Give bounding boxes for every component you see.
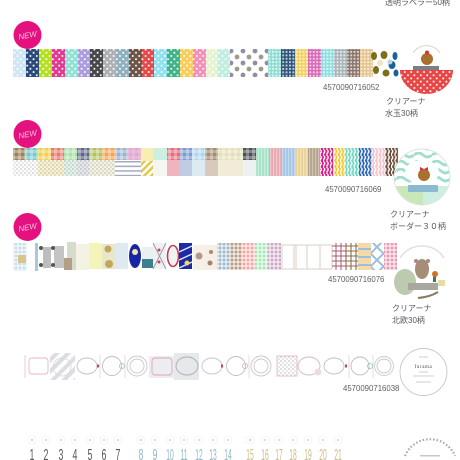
NEW badge row 2: NEW bbox=[18, 128, 39, 141]
NEW badge row 1 bbox=[14, 21, 42, 49]
barcode 3: 4570090716076 bbox=[328, 275, 384, 284]
product name 1 bbox=[385, 97, 426, 118]
product sticker: border waves bbox=[394, 149, 450, 206]
tape: nordic bbox=[13, 242, 397, 271]
product name 3: クリアーナ bbox=[392, 304, 432, 313]
barcode 4: 4570090716038 bbox=[343, 384, 399, 393]
product name 2: クリアーナ bbox=[390, 210, 430, 219]
tape: polka dots bbox=[13, 49, 398, 77]
NEW badge row 3 bbox=[14, 213, 42, 241]
product sticker: polka dot bowl bbox=[400, 46, 453, 94]
product name 2 bbox=[390, 210, 446, 231]
tape: frames bbox=[25, 353, 394, 380]
product name 1: 水玉30柄 bbox=[385, 108, 418, 118]
circular sticker: bottom right bbox=[405, 439, 455, 456]
product sticker: furama: furama bbox=[415, 365, 433, 370]
product name 2: ボーダー３０柄 bbox=[390, 221, 446, 231]
product name 1: クリアーナ bbox=[386, 97, 426, 106]
NEW badge row 2 bbox=[14, 120, 42, 148]
NEW badge row 3: NEW bbox=[18, 221, 39, 234]
product name 3 bbox=[392, 304, 432, 325]
tape: gingham and stripes bbox=[13, 148, 398, 176]
barcode 1: 4570090716052 bbox=[323, 83, 379, 92]
barcode 2: 4570090716069 bbox=[325, 185, 381, 194]
product sticker: nordic bear bbox=[394, 246, 445, 298]
product name 3: 北欧30柄 bbox=[392, 315, 425, 325]
product sticker: furama bbox=[400, 348, 447, 396]
NEW badge row 1: NEW bbox=[18, 29, 39, 42]
calendar numerals bbox=[28, 436, 342, 460]
